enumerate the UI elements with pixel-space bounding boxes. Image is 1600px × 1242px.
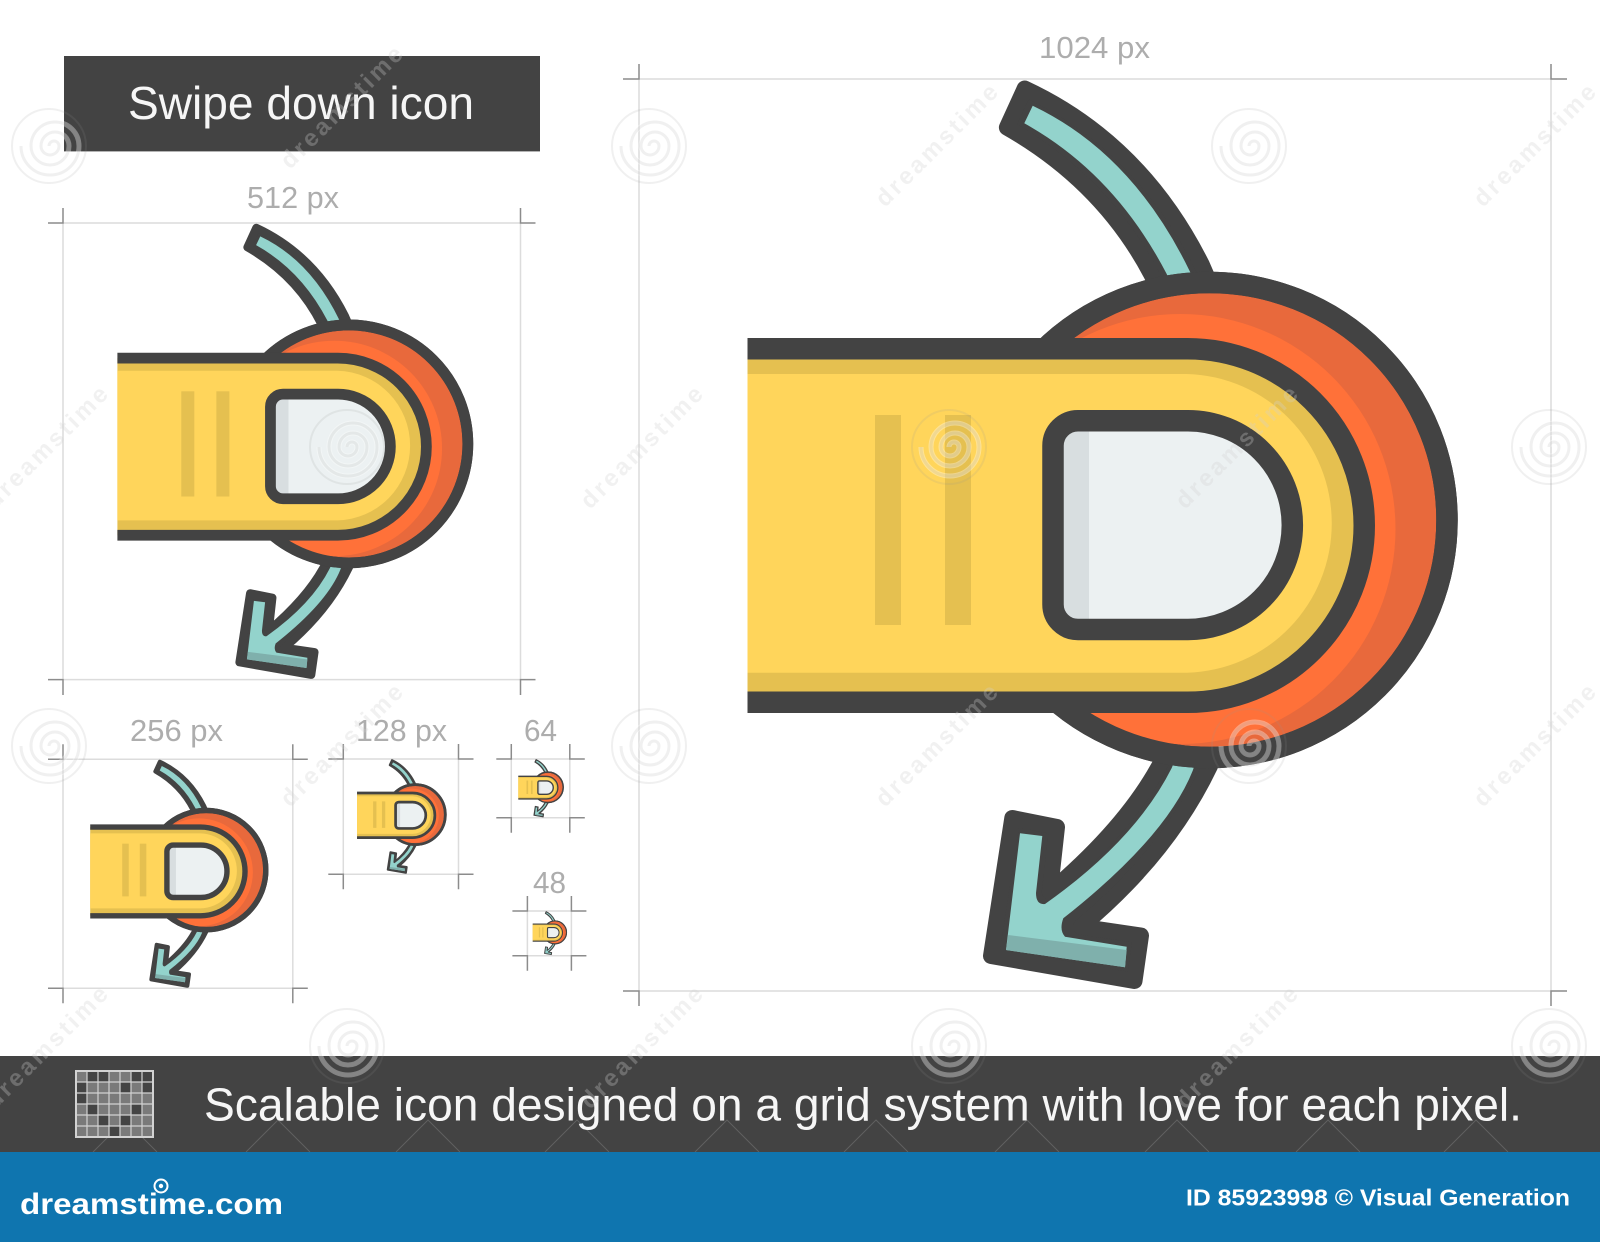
panel: 512 px icon preview — [48, 180, 536, 695]
watermark layer: dreamstime — [275, 677, 411, 812]
panel: footer bar — [0, 1152, 1600, 1242]
panel: 128 px icon preview — [328, 713, 474, 889]
size label: 1024 px: 1024 px — [1039, 30, 1150, 65]
icon: swipe down, 1024 px — [748, 88, 1447, 981]
panel: grid system banner — [0, 1056, 1600, 1152]
title text: Swipe down icon — [128, 77, 474, 129]
watermark layer: dreamstime — [870, 677, 1006, 812]
icon: swipe down, 512 px — [117, 228, 468, 675]
size label: 48: 48 — [533, 865, 566, 900]
watermark layer: dreamstime — [1468, 77, 1600, 212]
watermark layer: dreamstime — [1468, 677, 1600, 812]
watermark layer: dreamstime — [1170, 979, 1306, 1114]
size label: 64: 64 — [524, 713, 557, 748]
panel: 48 px icon preview — [512, 865, 586, 971]
banner text: Scalable icon designed on a grid system with love for each pixel. — [204, 1079, 1522, 1131]
size label: 256 px: 256 px — [130, 713, 223, 748]
icon: pixel grid — [76, 1071, 153, 1137]
watermark layer: dreamstime — [1170, 379, 1306, 514]
watermark layer: dreamstime — [575, 979, 711, 1114]
icon: swipe down, 64 px — [518, 760, 563, 817]
icon: swipe down, 48 px — [533, 911, 567, 955]
panel: title banner — [64, 56, 540, 151]
watermark layer: dreamstime — [275, 39, 411, 174]
watermark layer: dreamstime — [575, 379, 711, 514]
logo: dreamstime.com: dreamstime.com — [20, 1188, 283, 1221]
icon: swipe down, 128 px — [357, 760, 445, 873]
size label: 128 px: 128 px — [356, 713, 447, 748]
watermark layer: dreamstime — [870, 77, 1006, 212]
panel: 256 px icon preview — [48, 713, 308, 1003]
image credit: ID 85923998 © Visual Generation — [1186, 1185, 1570, 1211]
panel: 64 px icon preview — [496, 713, 585, 833]
icon: swipe down, 256 px — [90, 762, 266, 986]
size label: 512 px: 512 px — [247, 180, 339, 215]
